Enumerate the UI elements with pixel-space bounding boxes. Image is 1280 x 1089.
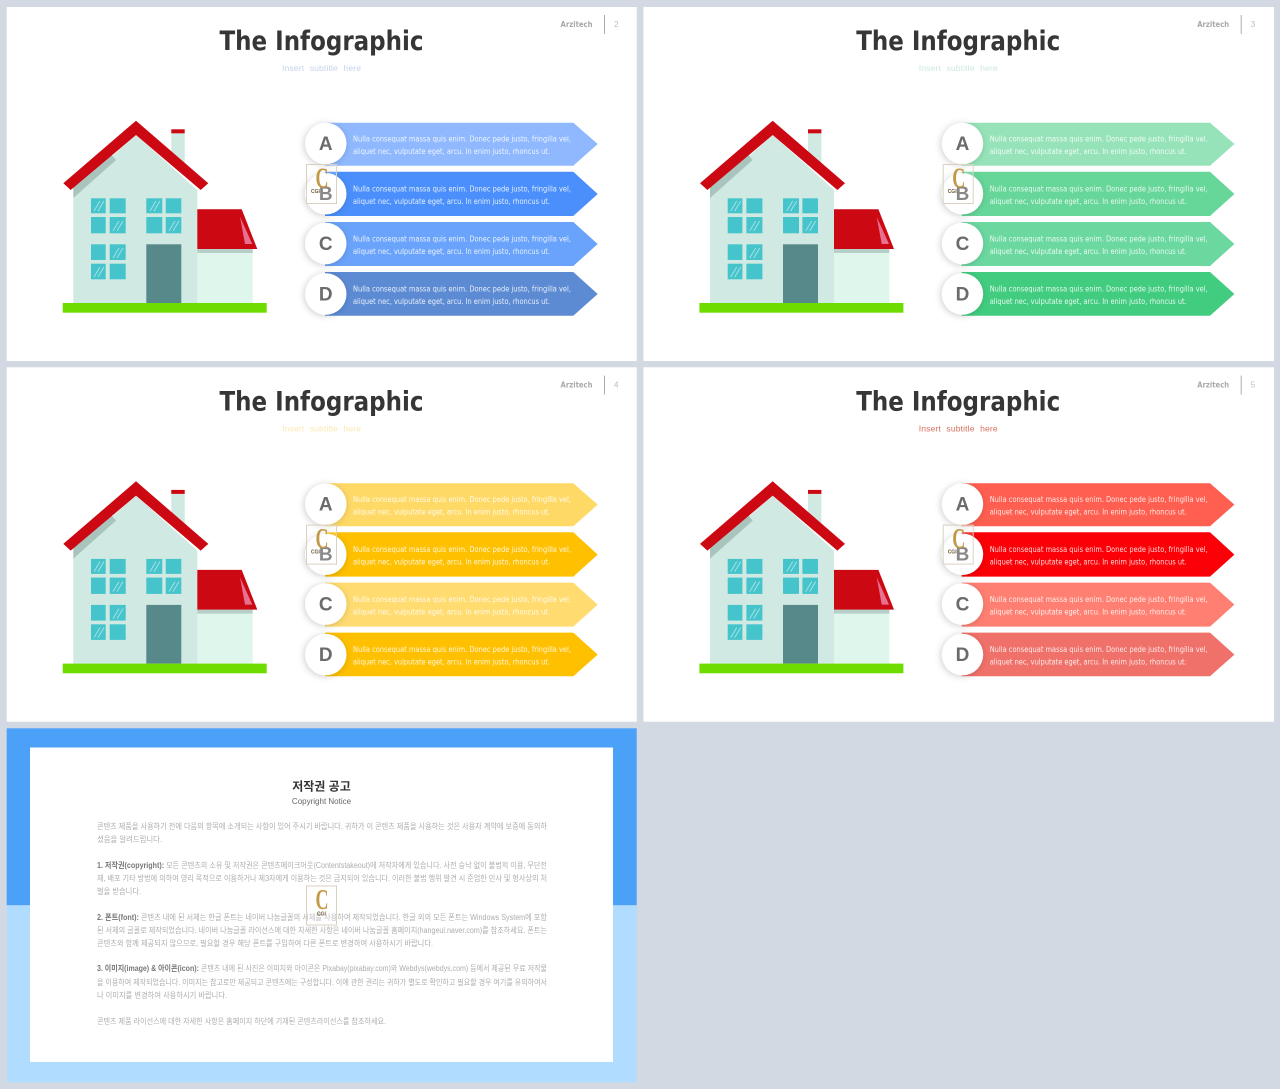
notice intro xyxy=(97,821,548,844)
panel: yellow slide xyxy=(7,367,637,722)
arrow D: Nulla consequat massa quis enim. Donec pede justo, fringilla vel, xyxy=(353,645,571,654)
arrow D xyxy=(305,272,598,316)
arrow B xyxy=(305,172,598,216)
arrow C: Nulla consequat massa quis enim. Donec pede justo, fringilla vel, xyxy=(353,595,571,604)
watermark: CGI xyxy=(317,912,326,918)
panel: green slide xyxy=(643,7,1274,361)
notice section 3 xyxy=(97,963,547,1000)
notice section 1: 벌을 받습니다. xyxy=(97,886,141,896)
arrow A: Nulla consequat massa quis enim. Donec pede justo, fringilla vel, xyxy=(990,134,1208,144)
notice footer line: 콘텐츠 제품 라이선스에 대한 자세한 사항은 홈페이지 하단에 기재된 콘텐츠라이선스를 참조하세요. xyxy=(97,1016,386,1026)
notice section 3: 3. 이미지(image) & 아이콘(icon): 콘텐츠 내에 된 사진은 이미지와 아이콘은 Pixabay(pixabay.com)와 Webdys(webdys.com) 등에서 제공된 무료 저작물 xyxy=(97,963,547,973)
subtitle: Insert subtitle here xyxy=(919,424,998,434)
arrow C: C xyxy=(956,595,970,616)
title: The Infographic xyxy=(220,26,424,57)
notice section 2 xyxy=(97,912,548,948)
arrow B: Nulla consequat massa quis enim. Donec pede justo, fringilla vel, xyxy=(990,545,1208,554)
arrow B: aliquet nec, vulputate eget, arcu. In enim justo, rhoncus ut. xyxy=(990,197,1187,206)
arrow C: C xyxy=(319,234,333,255)
arrow C: C xyxy=(319,595,333,616)
arrow A: aliquet nec, vulputate eget, arcu. In enim justo, rhoncus ut. xyxy=(353,508,550,517)
arrow A: aliquet nec, vulputate eget, arcu. In enim justo, rhoncus ut. xyxy=(990,508,1187,517)
arrow C: Nulla consequat massa quis enim. Donec pede justo, fringilla vel, xyxy=(353,234,571,244)
arrow B: aliquet nec, vulputate eget, arcu. In enim justo, rhoncus ut. xyxy=(990,558,1187,567)
subtitle: Insert subtitle here xyxy=(919,63,998,73)
arrow A: Nulla consequat massa quis enim. Donec pede justo, fringilla vel, xyxy=(353,495,571,504)
panel: red slide xyxy=(643,367,1274,722)
arrow D xyxy=(305,633,598,676)
arrow A: A xyxy=(956,495,970,516)
notice section 1: 재, 배포 기타 방법에 의하여 영리 목적으로 이용하거나 제3자에게 이용하는 것은 금지되어 있습니다. 이러한 불법 행위 발견 시 준엄한 민사 및 형사상의 처 xyxy=(97,873,547,883)
arrow C xyxy=(942,222,1234,266)
arrow B: Nulla consequat massa quis enim. Donec pede justo, fringilla vel, xyxy=(990,184,1208,194)
panel: copyright notice xyxy=(7,728,637,1082)
notice section 2: 2. 폰트(font): 콘텐츠 내에 된 서체는 한글 폰트는 네이버 나눔글꼴의 서체를 사용하여 제작되었습니다. 한글 외의 모든 폰트는 Windows System에 포함 xyxy=(97,912,548,922)
arrow A: A xyxy=(319,495,333,516)
arrow D: D xyxy=(319,284,333,306)
page number: 3 xyxy=(1251,20,1256,29)
icon: house xyxy=(699,121,903,313)
icon: house xyxy=(699,481,903,673)
arrow D: Nulla consequat massa quis enim. Donec pede justo, fringilla vel, xyxy=(990,284,1208,294)
arrow A xyxy=(305,483,598,526)
brand label: Arzitech xyxy=(560,381,592,390)
arrow C: aliquet nec, vulputate eget, arcu. In enim justo, rhoncus ut. xyxy=(990,608,1187,617)
notice intro: 셨음을 알려드립니다. xyxy=(97,834,162,844)
arrow B xyxy=(305,532,598,577)
arrow D: aliquet nec, vulputate eget, arcu. In enim justo, rhoncus ut. xyxy=(353,297,550,306)
arrow C: C xyxy=(956,234,970,255)
subtitle: Insert subtitle here xyxy=(282,63,361,73)
brand label: Arzitech xyxy=(1197,20,1229,29)
arrow C: Nulla consequat massa quis enim. Donec pede justo, fringilla vel, xyxy=(990,234,1208,244)
watermark xyxy=(306,524,336,564)
arrow B: B xyxy=(319,184,333,205)
arrow D: aliquet nec, vulputate eget, arcu. In enim justo, rhoncus ut. xyxy=(990,297,1187,306)
notice intro: 콘텐츠 제품을 사용하기 전에 다음의 항목에 소개되는 사항이 있어 주시기 바랍니다. 귀하가 이 콘텐츠 제품을 사용하는 것은 사용자 계약에 보증에 동의하 xyxy=(97,821,548,831)
panel: blue slide xyxy=(7,7,637,361)
arrow B: B xyxy=(319,545,333,566)
arrow D: D xyxy=(319,645,333,666)
arrow C xyxy=(942,583,1234,627)
notice section 3: 나 이미지를 변경하여 사용하시기 바랍니다. xyxy=(97,990,227,1000)
arrow A: Nulla consequat massa quis enim. Donec pede justo, fringilla vel, xyxy=(990,495,1208,504)
notice subheading: Copyright Notice xyxy=(292,797,352,806)
brand label: Arzitech xyxy=(560,20,592,29)
title: The Infographic xyxy=(856,387,1060,418)
notice heading: 저작권 공고 xyxy=(292,778,351,794)
watermark xyxy=(306,164,336,204)
arrow D: aliquet nec, vulputate eget, arcu. In enim justo, rhoncus ut. xyxy=(990,658,1187,667)
arrow C: aliquet nec, vulputate eget, arcu. In enim justo, rhoncus ut. xyxy=(353,247,550,256)
title: The Infographic xyxy=(220,387,424,418)
arrow A: A xyxy=(319,134,333,155)
page number: 4 xyxy=(614,381,619,390)
notice section 2: 콘텐츠와 함께 제공되지 않으므로, 필요할 경우 해당 폰트를 구입하여 다른 폰트로 변경하여 사용하시기 바랍니다. xyxy=(97,938,433,948)
notice section 1 xyxy=(97,860,547,896)
page number: 5 xyxy=(1251,381,1256,390)
icon: house xyxy=(63,481,267,673)
notice section 2: 된 서체의 글꼴로 제작되었습니다. 네이버 나눔글꼴 라이선스에 대한 자세한 사항은 네이버 나눔글꼴 홈페이지(hangeul.naver.com)를 참조하세요. 폰트는 xyxy=(97,925,547,935)
arrow A xyxy=(942,483,1234,526)
arrow A xyxy=(942,123,1234,166)
arrow B: Nulla consequat massa quis enim. Donec pede justo, fringilla vel, xyxy=(353,184,571,194)
page number: 2 xyxy=(614,20,619,29)
watermark xyxy=(943,164,973,204)
arrow B: B xyxy=(956,184,969,205)
watermark: C xyxy=(316,885,328,916)
arrow B: aliquet nec, vulputate eget, arcu. In enim justo, rhoncus ut. xyxy=(353,558,550,567)
notice section 1: 1. 저작권(copyright): 모든 콘텐츠의 소유 및 저작권은 콘텐츠메이크어웃(Contentstakeout)에 저작자에게 있습니다. 사전 승낙 없이 불법적 이용, 무단전 xyxy=(97,860,547,870)
arrow D: D xyxy=(956,645,969,666)
arrow A: aliquet nec, vulputate eget, arcu. In enim justo, rhoncus ut. xyxy=(990,147,1187,156)
arrow C: Nulla consequat massa quis enim. Donec pede justo, fringilla vel, xyxy=(990,595,1208,604)
arrow C: aliquet nec, vulputate eget, arcu. In enim justo, rhoncus ut. xyxy=(990,247,1187,256)
arrow D: aliquet nec, vulputate eget, arcu. In enim justo, rhoncus ut. xyxy=(353,658,550,667)
arrow A xyxy=(305,123,598,166)
icon: house xyxy=(63,121,267,313)
arrow B: aliquet nec, vulputate eget, arcu. In enim justo, rhoncus ut. xyxy=(353,197,550,206)
arrow D: D xyxy=(956,284,969,306)
brand label: Arzitech xyxy=(1197,381,1229,390)
notice section 3: 을 이용하여 제작되었습니다. 이미지는 참고로만 제공되고 콘텐츠에는 구성합니다. 이에 관한 권리는 귀하가 별도로 확인하고 필요할 경우 여기를 유의하여서 xyxy=(97,977,547,987)
arrow A: aliquet nec, vulputate eget, arcu. In enim justo, rhoncus ut. xyxy=(353,147,550,156)
arrow A: Nulla consequat massa quis enim. Donec pede justo, fringilla vel, xyxy=(353,134,571,144)
arrow D: Nulla consequat massa quis enim. Donec pede justo, fringilla vel, xyxy=(353,284,571,294)
arrow B xyxy=(942,172,1234,216)
arrow B xyxy=(942,532,1234,577)
watermark xyxy=(943,524,973,564)
arrow D xyxy=(942,633,1234,676)
arrow B: Nulla consequat massa quis enim. Donec pede justo, fringilla vel, xyxy=(353,545,571,554)
arrow D xyxy=(942,272,1234,316)
arrow A: A xyxy=(956,134,970,155)
title: The Infographic xyxy=(856,26,1060,57)
arrow D: Nulla consequat massa quis enim. Donec pede justo, fringilla vel, xyxy=(990,645,1208,654)
watermark xyxy=(306,885,336,925)
arrow C xyxy=(305,222,598,266)
arrow C xyxy=(305,583,598,627)
arrow C: aliquet nec, vulputate eget, arcu. In enim justo, rhoncus ut. xyxy=(353,608,550,617)
subtitle: Insert subtitle here xyxy=(282,424,361,434)
arrow B: B xyxy=(956,545,969,566)
